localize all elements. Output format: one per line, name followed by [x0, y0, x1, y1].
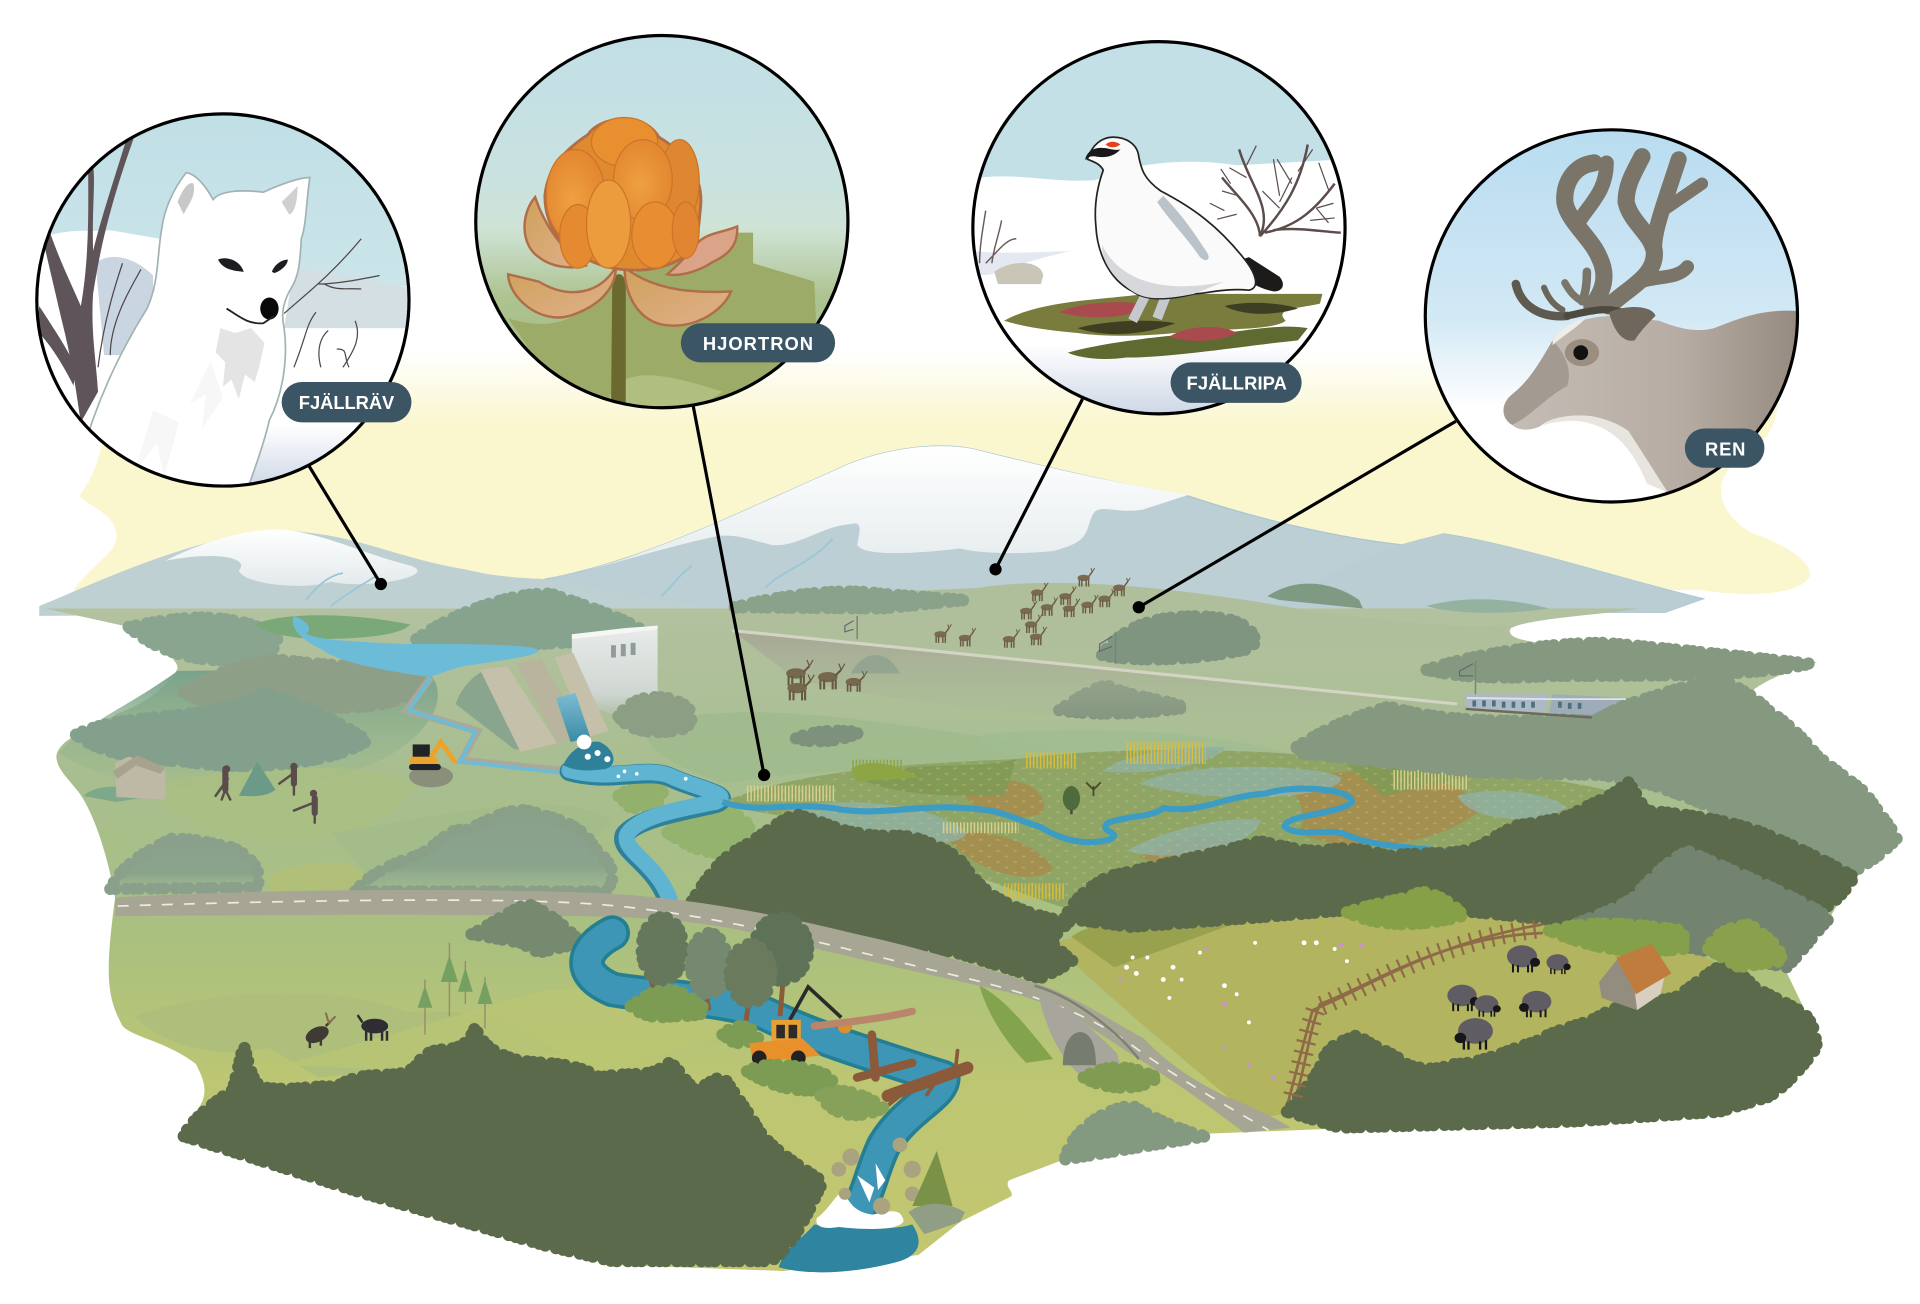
- railway: [732, 616, 1580, 735]
- canal: [407, 677, 569, 774]
- bridge: [980, 986, 1157, 1088]
- upper river: [293, 616, 539, 677]
- panel: reindeer: [1424, 129, 1800, 503]
- forest by stream: [631, 917, 808, 1043]
- land base: [45, 609, 1897, 1271]
- marsh river: [722, 789, 1480, 858]
- label: HJORTRON: HJORTRON: [703, 333, 813, 354]
- waterfall foam: [816, 1163, 904, 1229]
- label: HJORTRON: [681, 323, 835, 362]
- lower river upper part: [569, 770, 721, 900]
- forest: front-left: [184, 1027, 823, 1261]
- dam foam: [563, 735, 688, 781]
- medium forests: [110, 697, 750, 891]
- forest: bottom right: [1287, 963, 1817, 1128]
- excavator: [409, 742, 456, 787]
- far forests and hills: [76, 583, 1810, 766]
- barn: [1599, 944, 1671, 1010]
- panel: cloudberry: [475, 36, 849, 416]
- train: [1466, 694, 1626, 718]
- moose: [303, 1013, 388, 1048]
- tree by waterfall: [912, 1151, 953, 1206]
- meadow flowers: [1124, 940, 1349, 1024]
- pool: [779, 1224, 919, 1272]
- reeds: [747, 753, 1467, 891]
- young pines: [418, 943, 492, 1035]
- marsh: [722, 747, 1629, 912]
- road: [115, 890, 1291, 1133]
- label: FJÄLLRIPA: FJÄLLRIPA: [1187, 372, 1287, 393]
- panel: ptarmigan: [972, 40, 1347, 416]
- dam: [456, 653, 609, 752]
- fence: [1288, 924, 1543, 1102]
- rock slope by waterfall: [909, 1204, 965, 1234]
- people: [216, 763, 317, 823]
- label: FJÄLLRIPA: [1171, 362, 1302, 403]
- label: REN: REN: [1705, 438, 1745, 459]
- sheep: [1447, 945, 1571, 1050]
- harvester: [749, 987, 852, 1065]
- river lower: [587, 933, 943, 1224]
- small spruce: [239, 762, 276, 796]
- wetland by lake: [255, 615, 410, 639]
- forest: center dark: [692, 814, 1073, 978]
- bushes by harvester: [747, 1065, 884, 1115]
- label: REN: [1685, 429, 1764, 468]
- reindeer herd: [934, 568, 1130, 648]
- purple flowers: [1118, 943, 1364, 1079]
- cabin: [83, 755, 165, 802]
- label: FJÄLLRÄV: [282, 382, 411, 422]
- forest: right medium: [1297, 681, 1897, 872]
- forest: right mid: [1560, 851, 1829, 967]
- ground patches: [59, 667, 1732, 1117]
- rocks: [831, 1137, 921, 1215]
- label: FJÄLLRÄV: FJÄLLRÄV: [299, 392, 395, 413]
- sky background: [74, 349, 1810, 594]
- bush meadow: [1347, 891, 1782, 967]
- power building: [572, 626, 658, 722]
- panel: arctic fox: [37, 114, 416, 490]
- marsh tree: [1063, 782, 1101, 814]
- reindeer near tunnel: [786, 655, 900, 700]
- forest: small near road: [471, 904, 582, 953]
- forest: long dark: [1064, 781, 1854, 927]
- callout lines: [309, 399, 1456, 781]
- mountains: [39, 446, 1703, 616]
- fallen trees: [814, 1011, 967, 1106]
